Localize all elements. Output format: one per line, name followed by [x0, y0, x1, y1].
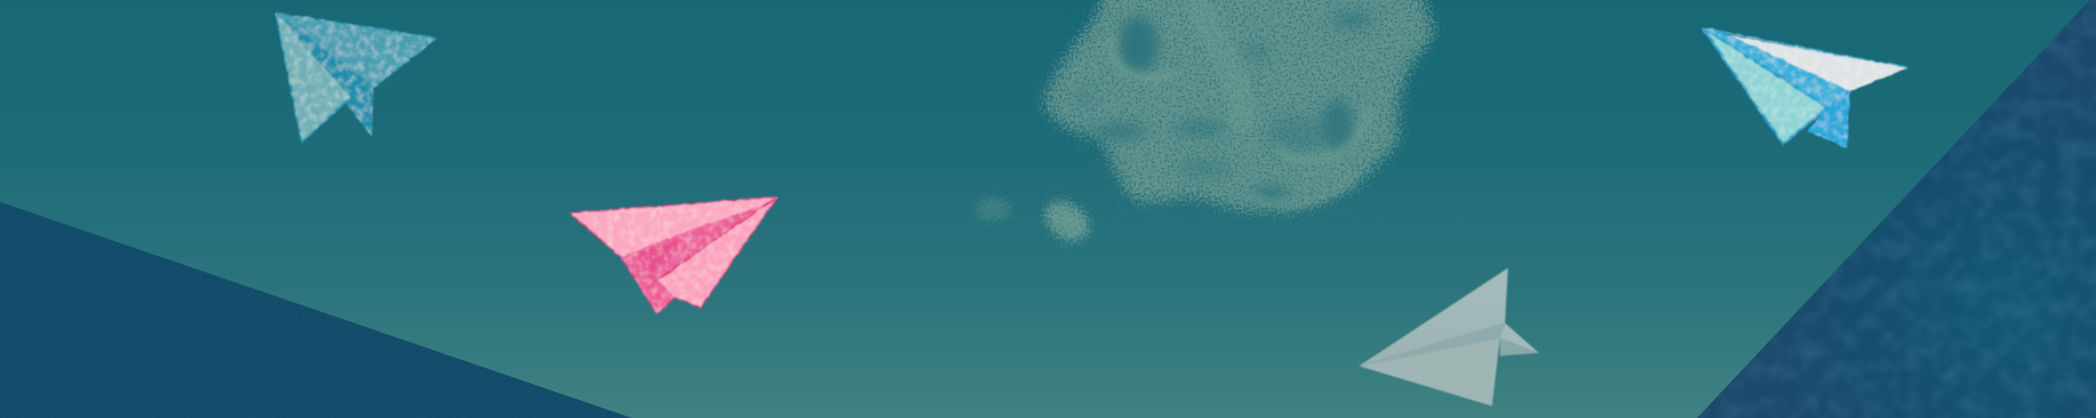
left dark navy slope [0, 200, 640, 418]
paper plane: teal watercolor [276, 13, 436, 142]
right dark navy slope [1690, 0, 2096, 418]
cloud: small wisp [971, 189, 1101, 253]
paper plane: pale grey [1359, 268, 1539, 406]
cloud: large swirling cloud [1036, 0, 1442, 216]
paper plane: pink watercolor [570, 197, 777, 313]
paper plane: bright blue and white [1703, 28, 1907, 148]
